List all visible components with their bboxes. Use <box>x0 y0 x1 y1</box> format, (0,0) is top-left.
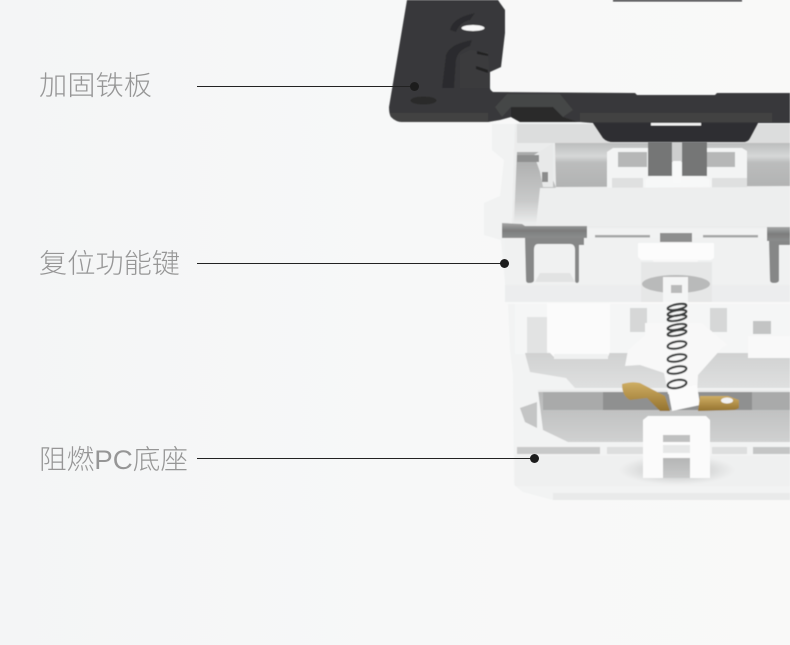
centre clip <box>607 148 747 200</box>
floor of the module <box>536 187 790 226</box>
black reinforcing plate <box>389 0 790 142</box>
reset key fork, right <box>767 227 790 241</box>
label: 阻燃PC底座 <box>39 445 539 475</box>
mounting holes <box>462 25 484 31</box>
bottom module: flame-retardant PC base <box>508 303 790 500</box>
left inner wall <box>514 152 556 222</box>
spring <box>667 303 687 390</box>
reset key fork, left <box>502 223 587 238</box>
label: 阻燃PC底座: 阻燃PC底座 <box>39 445 188 475</box>
label: 加固铁板: 加固铁板 <box>39 71 152 101</box>
front wall <box>517 447 600 454</box>
cavity <box>555 143 790 187</box>
label: 加固铁板 <box>39 71 419 101</box>
label: 复位功能键: 复位功能键 <box>39 249 180 279</box>
front wall <box>505 238 790 302</box>
recess beside the hole <box>442 40 472 88</box>
tray <box>538 390 790 442</box>
slider <box>625 323 728 394</box>
label: 复位功能键 <box>39 249 509 279</box>
clip <box>643 416 710 478</box>
brass contacts <box>622 382 670 411</box>
centre tab <box>638 243 714 260</box>
middle module: reset key housing <box>484 122 790 302</box>
inner details <box>527 317 547 353</box>
